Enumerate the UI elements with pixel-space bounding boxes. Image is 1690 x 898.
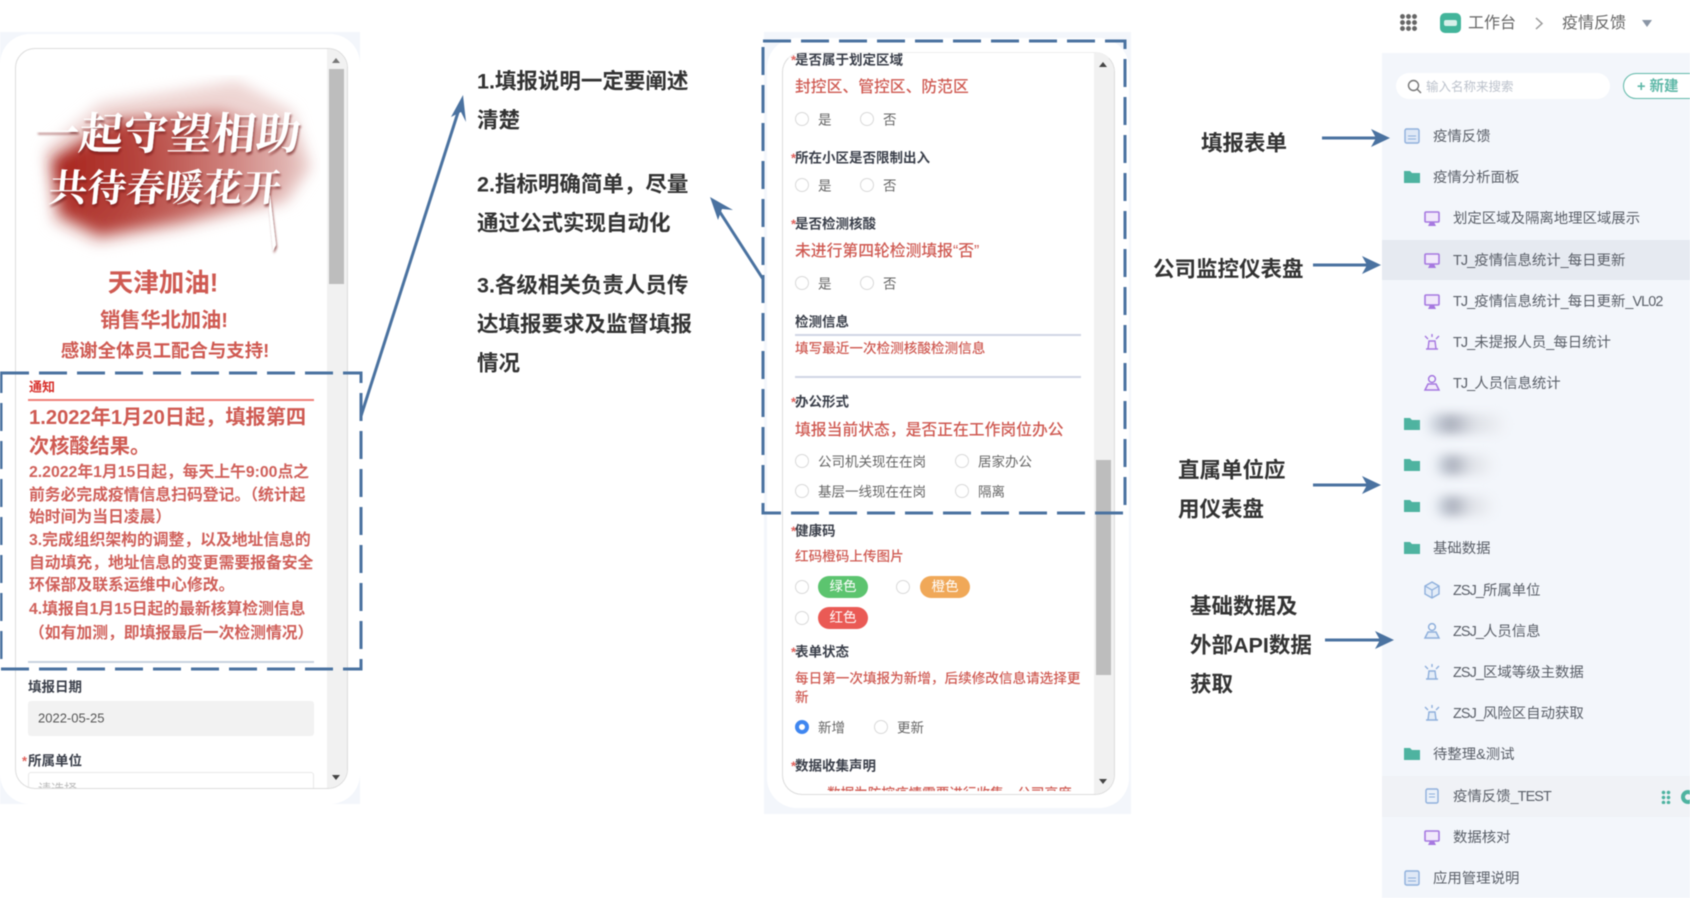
field: 填报日期 bbox=[28, 678, 314, 736]
callout: 直属单位应用仪表盘 bbox=[1178, 458, 1286, 521]
row: 疫情反馈: 疫情反馈 bbox=[1433, 129, 1491, 145]
panel: indicator form phone mockup bbox=[764, 32, 1131, 814]
breadcrumb separator bbox=[1535, 17, 1544, 30]
field: 是否检测核酸: 是 bbox=[818, 276, 832, 291]
row: 疫情反馈_TEST hovered: 疫情反馈_TEST bbox=[1453, 789, 1551, 805]
notice text block: 2.2022年1月15日起，每天上午9:00点之 bbox=[29, 464, 309, 481]
field: 是否属于划定区域: 封控区、管控区、防范区 bbox=[795, 79, 969, 96]
row: ZSJ_人员信息: ZSJ_人员信息 bbox=[1453, 624, 1541, 640]
field: 是否检测核酸: 否 bbox=[883, 276, 896, 291]
row: blurred folder 1 bbox=[1403, 408, 1496, 440]
field: 是否属于划定区域: * bbox=[791, 52, 796, 68]
slogan: 天津加油: 天津加油! bbox=[108, 269, 218, 297]
field: 办公形式: 公司机关现在在岗 bbox=[818, 454, 926, 469]
callout: instruction 1 bbox=[477, 69, 688, 132]
icon: app grid bbox=[1400, 14, 1418, 32]
callout: instruction 2 bbox=[476, 172, 688, 235]
row: 应用管理说明: 应用管理说明 bbox=[1433, 871, 1519, 887]
callout: instruction 3: 情况 bbox=[477, 351, 520, 375]
field: 是否属于划定区域: 是否属于划定区域 bbox=[795, 52, 903, 67]
callout: 基础数据及外部API数据获取: 外部API数据 bbox=[1190, 633, 1312, 657]
field: 健康码 bbox=[790, 522, 971, 630]
row: blurred folder 3 bbox=[1403, 490, 1486, 522]
field: 数据收集声明: * bbox=[791, 758, 796, 774]
row: 数据核对 bbox=[1424, 829, 1511, 846]
callout: instruction 1: 1.填报说明一定要阐述 bbox=[477, 69, 688, 93]
row: TJ_人员信息统计: TJ_人员信息统计 bbox=[1453, 376, 1561, 392]
arrow: to 疫情反馈 row bbox=[1321, 128, 1390, 148]
field: 表单状态: * bbox=[791, 644, 796, 660]
field: 填报日期: 2022-05-25 bbox=[38, 710, 104, 726]
callout: 基础数据及外部API数据获取 bbox=[1190, 594, 1312, 696]
field: 表单状态: 表单状态 bbox=[795, 644, 849, 659]
field: 是否属于划定区域 bbox=[790, 52, 969, 127]
form frame: notice form bbox=[15, 48, 348, 789]
row: 划定区域及隔离地理区域展示: 划定区域及隔离地理区域展示 bbox=[1453, 211, 1640, 227]
field: 所在小区是否限制出入 bbox=[790, 150, 930, 193]
breadcrumb: 疫情反馈: 疫情反馈 bbox=[1562, 15, 1626, 32]
callout: 基础数据及外部API数据获取: 基础数据及 bbox=[1190, 594, 1298, 618]
callout: 公司监控仪表盘: 公司监控仪表盘 bbox=[1153, 257, 1304, 281]
dashed highlight: notice bbox=[0, 370, 364, 672]
callout: 填报表单: 填报表单 bbox=[1201, 131, 1287, 155]
banner image: calligraphy slogan bbox=[32, 76, 316, 254]
field: 所属单位 bbox=[22, 752, 314, 788]
notice text block: 次核酸结果。 bbox=[29, 436, 150, 458]
field: 检测信息 bbox=[794, 314, 1082, 378]
field: 检测信息: 检测信息 bbox=[795, 314, 849, 329]
notice text block: 自动填充，地址信息的变更需要报备安全 bbox=[29, 555, 313, 572]
field: 办公形式: 填报当前状态，是否正在工作岗位办公 bbox=[795, 422, 1064, 439]
arrow: notice to instruction 1 bbox=[362, 94, 467, 416]
row: 疫情反馈_TEST hovered bbox=[1382, 776, 1690, 817]
notice text block: 环保部及联系运维中心修改。 bbox=[29, 577, 234, 594]
field: 检测信息: 填写最近一次检测核酸检测信息 bbox=[795, 341, 985, 356]
field: 所在小区是否限制出入: 是 bbox=[818, 178, 832, 193]
field: 健康码: 红码橙码上传图片 bbox=[795, 549, 904, 564]
callout: instruction 3: 3.各级相关负责人员传 bbox=[477, 273, 688, 297]
breadcrumb: 工作台: 工作台 bbox=[1468, 15, 1516, 32]
field: 办公形式: * bbox=[791, 394, 796, 410]
notice text block bbox=[27, 380, 315, 664]
notice text block: 3.完成组织架构的调整，以及地址信息的 bbox=[29, 532, 311, 549]
field: 所属单位: * bbox=[22, 754, 27, 768]
row: 疫情反馈 bbox=[1404, 128, 1491, 145]
field: 健康码: * bbox=[791, 524, 796, 538]
new button bbox=[1623, 73, 1690, 99]
row: TJ_疫情信息统计_每日更新 selected: TJ_疫情信息统计_每日更新 bbox=[1453, 253, 1625, 269]
row: ZSJ_所属单位 bbox=[1424, 580, 1541, 600]
row: TJ_疫情信息统计_每日更新_VL02: TJ_疫情信息统计_每日更新_VL02 bbox=[1453, 294, 1662, 310]
notice text block: （如有加测，即填报最后一次检测情况） bbox=[29, 625, 313, 642]
arrow: form to instruction 2 bbox=[710, 196, 762, 280]
icon: workbench logo bbox=[1440, 13, 1461, 33]
field: 表单状态 bbox=[790, 644, 1080, 735]
field: 健康码: 橙色 bbox=[932, 579, 958, 594]
row: ZSJ_人员信息 bbox=[1424, 622, 1541, 640]
field: 办公形式 bbox=[790, 394, 1064, 499]
top navigation bar bbox=[1382, 0, 1690, 53]
arrow: to base data rows bbox=[1323, 628, 1395, 652]
row: 基础数据: 基础数据 bbox=[1433, 541, 1491, 557]
slogan: 感谢全体员工: 感谢全体员工配合与支持! bbox=[61, 340, 269, 361]
banner image: calligraphy slogan: 一起守望相助 bbox=[32, 98, 305, 162]
slogan: 销售华北加油: 销售华北加油! bbox=[100, 310, 228, 332]
row: ZSJ_所属单位: ZSJ_所属单位 bbox=[1453, 583, 1541, 599]
arrow: to dashboard row bbox=[1311, 253, 1383, 277]
field: 办公形式: 办公形式 bbox=[795, 394, 849, 409]
field: 是否检测核酸: * bbox=[791, 216, 796, 232]
field: 健康码: 红色 bbox=[830, 610, 856, 625]
callout: instruction 3: 达填报要求及监督填报 bbox=[477, 312, 692, 336]
notice text block: 通知 bbox=[29, 380, 55, 394]
field: 表单状态: 新增 bbox=[818, 720, 845, 735]
row: TJ_疫情信息统计_每日更新 selected bbox=[1382, 240, 1690, 280]
field: 健康码: 健康码 bbox=[795, 523, 836, 538]
field: 办公形式: 居家办公 bbox=[978, 454, 1032, 469]
field: 是否检测核酸: 是否检测核酸 bbox=[795, 216, 876, 231]
row: TJ_人员信息统计 bbox=[1424, 374, 1561, 392]
callout: instruction 3 bbox=[476, 273, 692, 375]
arrow: to unit dashboards bbox=[1311, 473, 1383, 497]
search box bbox=[1396, 73, 1610, 99]
field: 是否检测核酸 bbox=[790, 216, 980, 291]
row: TJ_未提报人员_每日统计: TJ_未提报人员_每日统计 bbox=[1453, 335, 1611, 351]
callout: instruction 1: 清楚 bbox=[477, 108, 520, 132]
callout: instruction 2: 通过公式实现自动化 bbox=[477, 211, 671, 235]
field: 是否检测核酸: 未进行第四轮检测填报“否” bbox=[795, 243, 979, 260]
callout: 直属单位应用仪表盘: 用仪表盘 bbox=[1178, 497, 1264, 521]
panel: notice form phone mockup bbox=[0, 32, 360, 804]
notice text block: 1.2022年1月20日起，填报第四 bbox=[29, 407, 306, 429]
field: 是否属于划定区域: 否 bbox=[883, 112, 896, 127]
row: 数据核对: 数据核对 bbox=[1453, 830, 1511, 846]
field: 所在小区是否限制出入: 所在小区是否限制出入 bbox=[795, 150, 930, 165]
search box: 输入名称来搜索 bbox=[1426, 80, 1514, 94]
notice text block: 始时间为当日凌晨） bbox=[29, 509, 171, 526]
callout: 直属单位应用仪表盘: 直属单位应 bbox=[1178, 458, 1286, 482]
row: 应用管理说明 bbox=[1404, 870, 1520, 887]
icon: dropdown caret bbox=[1642, 20, 1652, 27]
field: 所在小区是否限制出入: 否 bbox=[883, 178, 896, 193]
row: ZSJ_区域等级主数据: ZSJ_区域等级主数据 bbox=[1453, 665, 1584, 681]
field: 所在小区是否限制出入: * bbox=[791, 150, 796, 166]
field: 办公形式: 隔离 bbox=[978, 484, 1005, 499]
field: 表单状态: 更新 bbox=[897, 720, 924, 735]
field: 数据收集声明 bbox=[790, 758, 1072, 792]
field: 健康码: 绿色 bbox=[830, 579, 856, 594]
form frame: indicator form bbox=[782, 52, 1115, 795]
scrollbar bbox=[327, 49, 347, 788]
callout: instruction 2: 2.指标明确简单，尽量 bbox=[477, 172, 688, 196]
row: 待整理&测试: 待整理&测试 bbox=[1433, 747, 1515, 763]
field: 数据收集声明: 数据收集声明 bbox=[795, 758, 876, 773]
field: 所属单位: 所属单位 bbox=[28, 753, 82, 768]
panel: app navigation sidebar bbox=[1382, 53, 1690, 898]
field: 是否属于划定区域: 是 bbox=[818, 112, 832, 127]
field: 表单状态: 每日第一次填报为新增，后续修改信息请选择更 bbox=[795, 671, 1080, 686]
scrollbar bbox=[1094, 53, 1114, 794]
notice text block: 4.填报自1月15日起的最新核算检测信息 bbox=[29, 601, 305, 618]
dashed highlight: form fields bbox=[760, 38, 1128, 516]
notice text block: 前务必完成疫情信息扫码登记。（统计起 bbox=[29, 487, 305, 504]
row: 待整理&测试 bbox=[1403, 746, 1515, 763]
field: 表单状态: 新 bbox=[795, 690, 809, 705]
new button: + 新建 bbox=[1637, 79, 1678, 95]
row: 疫情分析面板: 疫情分析面板 bbox=[1433, 170, 1519, 186]
row: 基础数据 bbox=[1403, 540, 1491, 557]
field: 填报日期: 填报日期 bbox=[28, 679, 82, 694]
banner image: calligraphy slogan: 共待春暖花开 bbox=[47, 157, 284, 212]
callout: 基础数据及外部API数据获取: 获取 bbox=[1190, 672, 1233, 696]
row: blurred folder 2 bbox=[1403, 450, 1486, 480]
field: 办公形式: 基层一线现在在岗 bbox=[818, 484, 926, 499]
row: ZSJ_风险区自动获取: ZSJ_风险区自动获取 bbox=[1453, 706, 1584, 722]
